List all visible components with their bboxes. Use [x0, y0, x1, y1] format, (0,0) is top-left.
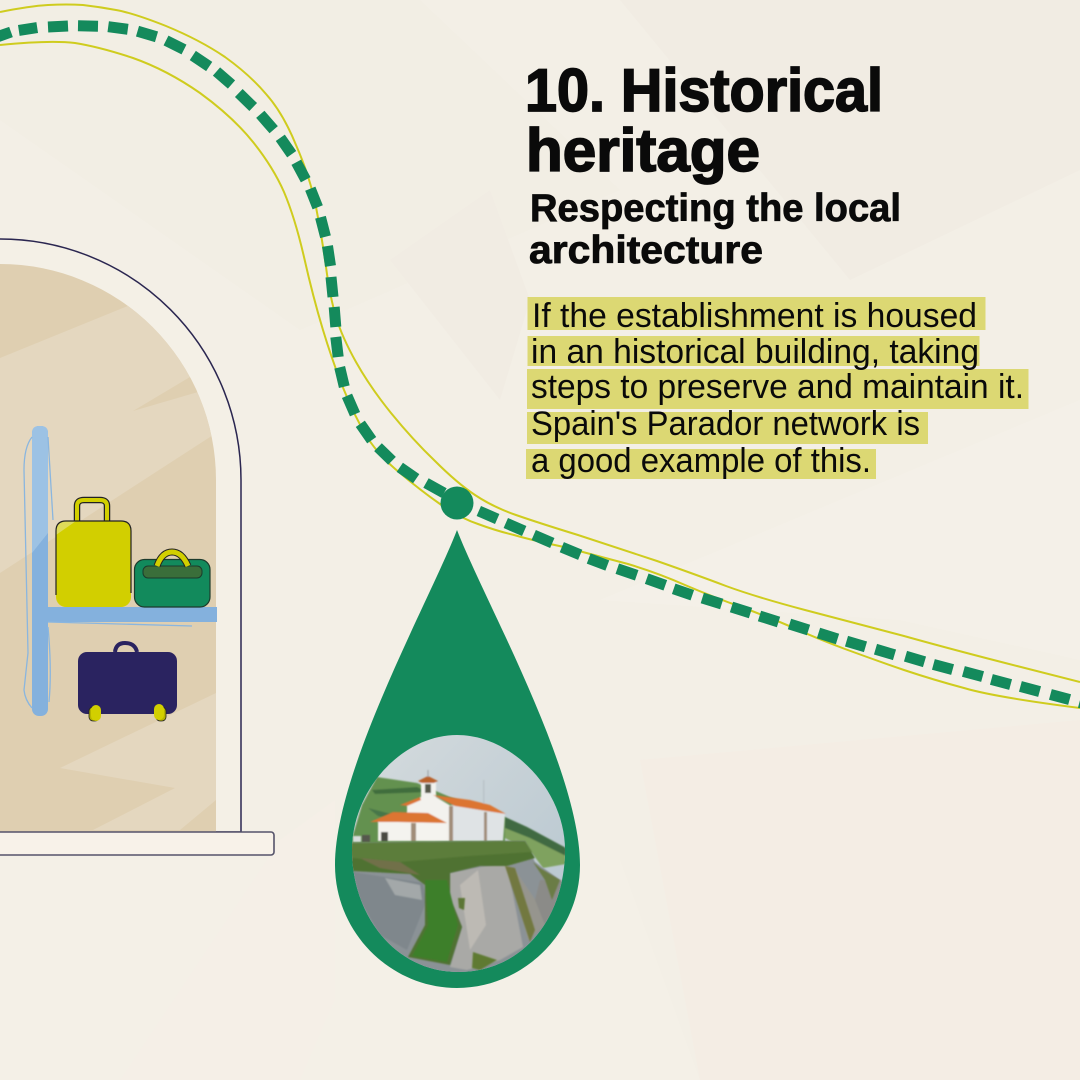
map pin drop [335, 530, 580, 988]
photo: church on a cliff [352, 735, 565, 972]
arch interior [0, 260, 230, 835]
highlighted body text: If the establishment is housed [532, 297, 977, 335]
icon: yellow suitcase [56, 500, 131, 607]
luggage shelf [24, 426, 217, 721]
subtitle: architecture [529, 229, 763, 272]
subtitle [529, 187, 901, 272]
window sill [0, 832, 274, 855]
highlighted body text: Spain's Parador network is [531, 405, 920, 443]
icon: green bag [134, 552, 210, 607]
highlighted body text: steps to preserve and maintain it. [531, 368, 1024, 406]
arch window [0, 239, 274, 855]
subtitle: Respecting the local [530, 187, 901, 230]
highlighted body text: a good example of this. [531, 442, 871, 480]
highlighted body text: in an historical building, taking [531, 333, 979, 371]
route: green dashed line [0, 26, 1080, 708]
route outline: yellow lines [0, 4, 1080, 708]
arch frame [0, 239, 241, 832]
shelf upright and board [32, 426, 217, 716]
church [353, 770, 506, 842]
cliff [352, 840, 562, 972]
title: 10. Historical [525, 57, 883, 124]
route marker dot [440, 486, 474, 520]
icon: navy suitcase [78, 643, 177, 721]
title: heritage [526, 117, 760, 184]
title [525, 57, 883, 184]
highlighted body text [526, 297, 1028, 480]
